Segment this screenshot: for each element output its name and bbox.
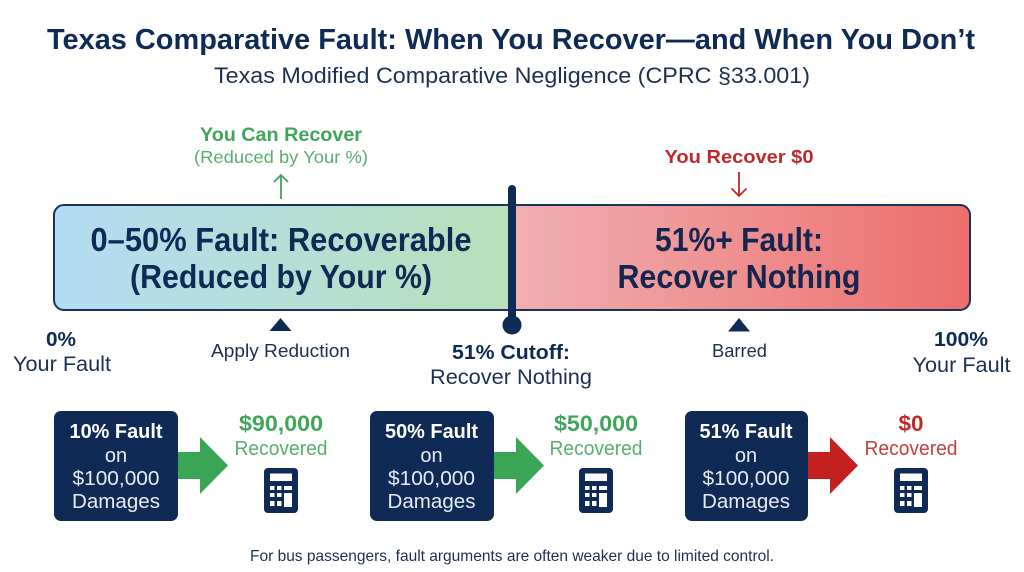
marker: barred (712, 318, 767, 361)
icon: calculator (579, 468, 613, 513)
heading: recoverable (90, 221, 472, 295)
subtitle: Texas Modified Comparative Negligence (CPRC §33.001) (214, 63, 810, 88)
card: 51% fault: Damages (702, 491, 790, 513)
result: $90,000: Recovered (234, 438, 328, 460)
label: 0% your fault (13, 329, 111, 376)
card: 50% fault: on (420, 445, 443, 467)
heading: recoverable: (Reduced by Your %) (130, 258, 432, 295)
marker: barred: Barred (712, 340, 767, 361)
card: 51% fault: $100,000 (702, 468, 790, 490)
label: 51% cutoff (430, 342, 592, 389)
result: $0: $0 (898, 411, 924, 436)
card: 10% fault: 10% Fault (70, 421, 163, 443)
arrow: up green (274, 175, 288, 199)
heading: recover nothing: 51%+ Fault: (655, 221, 823, 258)
card: 50% fault (370, 411, 494, 521)
label: 100% your fault: Your Fault (912, 354, 1011, 377)
icon: calculator (894, 468, 928, 513)
label: 51% cutoff: 51% Cutoff: (452, 342, 570, 364)
example: 10% fault (54, 411, 328, 521)
result: $50,000: $50,000 (554, 411, 638, 436)
title: Texas Comparative Fault: When You Recover—and When You Don’t (47, 24, 975, 56)
label: 100% your fault (912, 329, 1011, 377)
callout: you can recover (194, 125, 368, 167)
panel: fault bar (54, 205, 970, 310)
label: 0% your fault: 0% (46, 329, 76, 351)
card: 50% fault: Damages (388, 491, 476, 513)
result: $90,000: $90,000 (239, 411, 323, 436)
marker: apply reduction (211, 318, 350, 361)
card: 10% fault (54, 411, 178, 521)
callout: you can recover: (Reduced by Your %) (194, 147, 368, 167)
label: 51% cutoff: Recover Nothing (430, 366, 592, 389)
result: $0: Recovered (864, 438, 958, 460)
card: 51% fault: 51% Fault (700, 421, 793, 443)
cutoff marker (502, 185, 522, 334)
card: 10% fault: Damages (72, 491, 160, 513)
footnote: For bus passengers, fault arguments are often weaker due to limited control. (250, 548, 774, 565)
card: 50% fault: $100,000 (388, 468, 475, 490)
heading: recover nothing: Recover Nothing (618, 258, 860, 295)
icon: calculator (264, 468, 298, 513)
heading: recoverable: 0–50% Fault: Recoverable (90, 221, 472, 258)
marker: apply reduction: Apply Reduction (211, 340, 350, 361)
result: $50,000 (550, 411, 642, 460)
result: $50,000: Recovered (550, 438, 642, 460)
example: 51% fault (685, 411, 958, 521)
result: $90,000 (234, 411, 328, 460)
panel: barred zone (512, 205, 970, 310)
result: $0 (864, 411, 958, 460)
card: 50% fault: 50% Fault (385, 421, 478, 443)
arrow: red (808, 437, 858, 494)
card: 51% fault: on (735, 445, 757, 467)
panel: recoverable zone (54, 205, 512, 310)
example: 50% fault (370, 411, 642, 521)
card: 10% fault: $100,000 (72, 468, 160, 490)
arrow: green (178, 437, 228, 494)
arrow: down red (732, 172, 746, 196)
card: 10% fault: on (105, 445, 127, 467)
card: 51% fault (685, 411, 808, 521)
heading: recover nothing (618, 221, 860, 295)
label: 0% your fault: Your Fault (13, 353, 111, 376)
callout: you recover $0: You Recover $0 (664, 146, 814, 167)
callout: you can recover: You Can Recover (200, 125, 363, 146)
arrow: green (494, 437, 544, 494)
label: 100% your fault: 100% (934, 329, 988, 351)
